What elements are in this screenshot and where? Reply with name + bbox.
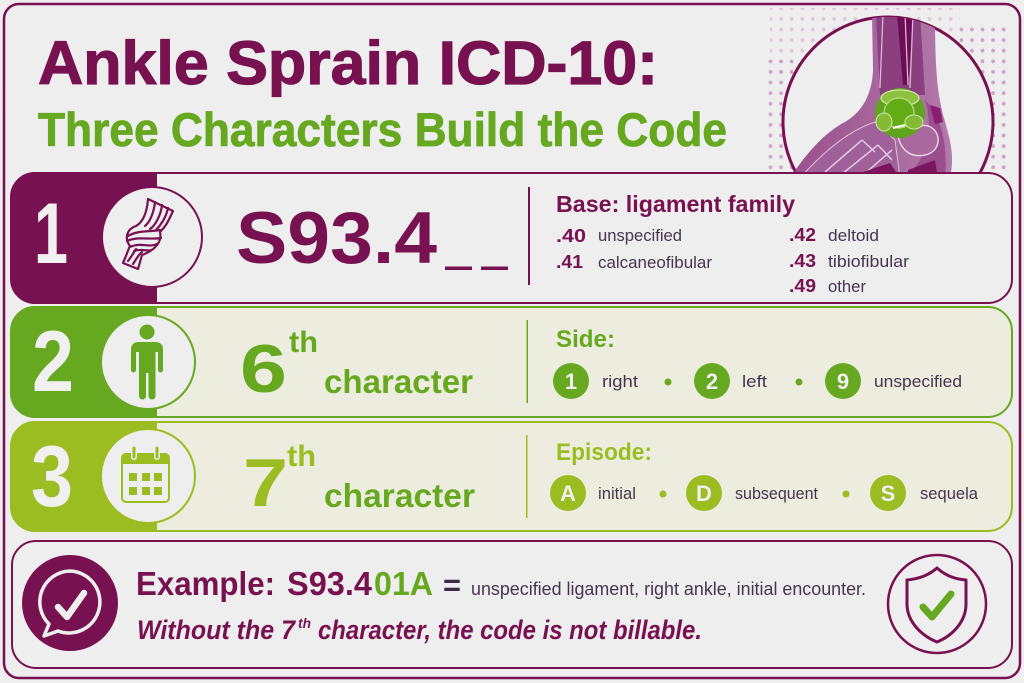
example code line: 01A	[374, 565, 433, 602]
example panel	[12, 541, 1012, 668]
row 3 number: 3	[31, 429, 73, 525]
seventh character label: th	[287, 440, 316, 473]
subtitle: Three Characters Build the Code	[38, 103, 727, 156]
side options	[553, 326, 962, 399]
episode options: initial	[598, 484, 636, 503]
billing warning: Without the 7	[137, 615, 297, 645]
ligament family list: other	[828, 277, 866, 296]
row 2 person icon	[101, 315, 195, 409]
row 1 number: 1	[34, 186, 68, 282]
ligament family list	[556, 191, 909, 296]
side options: left	[742, 372, 767, 391]
highlighted ankle joint	[875, 88, 925, 138]
side options: Side:	[556, 326, 615, 353]
ligament family list: calcaneofibular	[598, 253, 712, 272]
row 3 calendar icon	[101, 429, 195, 523]
billing warning: character, the code is not billable.	[318, 615, 702, 645]
sixth character label	[240, 326, 473, 407]
sixth character label: th	[289, 326, 318, 359]
side options: right	[602, 372, 638, 391]
example code line: Example:	[136, 565, 275, 602]
row 3: 7th character	[11, 421, 1012, 532]
ligament family list: .40	[556, 226, 586, 246]
title: Ankle Sprain ICD-10:	[38, 29, 658, 97]
row 2 number block	[11, 306, 157, 418]
row 1 number block	[11, 172, 157, 304]
seventh character label: 7	[243, 445, 288, 521]
seventh character label: character	[324, 477, 475, 514]
billing warning	[137, 615, 702, 645]
billing warning: th	[298, 615, 311, 631]
episode options: sequela	[920, 484, 979, 503]
episode options: Episode:	[556, 439, 652, 466]
sixth character label: 6	[240, 331, 287, 407]
row 2: 6th character	[11, 306, 1012, 418]
ligament family list: .42	[789, 225, 816, 245]
episode options: subsequent	[735, 484, 818, 503]
example code line: unspecified ligament, right ankle, initial encounter.	[471, 579, 866, 599]
ligament family list: .41	[556, 252, 583, 272]
side options: 2	[706, 369, 718, 394]
ankle illustration	[782, 16, 994, 172]
icon: shield check	[888, 555, 986, 653]
row 1: base code	[11, 172, 1012, 304]
ligament family list: deltoid	[828, 226, 879, 245]
episode options: S	[881, 481, 895, 506]
episode options	[550, 439, 979, 511]
halftone dot decoration	[763, 8, 1012, 175]
ligament family list: tibiofibular	[828, 252, 909, 271]
sixth character label: character	[324, 363, 473, 400]
example code line: S93.4	[287, 565, 373, 602]
episode options: A	[560, 481, 576, 506]
side options: 9	[837, 369, 849, 394]
ligament family list: unspecified	[598, 226, 682, 245]
episode options: D	[696, 481, 712, 506]
example code line	[136, 565, 866, 602]
side options: unspecified	[874, 372, 962, 391]
row 1 ligament icon	[102, 187, 202, 287]
seventh character label	[243, 440, 475, 521]
row 2 number: 2	[32, 314, 74, 410]
side options: 1	[565, 369, 577, 394]
ligament family list: Base: ligament family	[556, 191, 795, 217]
ligament family list: .43	[789, 251, 816, 271]
ligament family list: .49	[789, 276, 816, 296]
base code: S93.4	[236, 198, 437, 279]
row 3 number block	[11, 421, 157, 532]
code blanks	[445, 266, 508, 270]
icon: speech bubble check	[22, 555, 118, 651]
example code line: =	[443, 569, 461, 602]
